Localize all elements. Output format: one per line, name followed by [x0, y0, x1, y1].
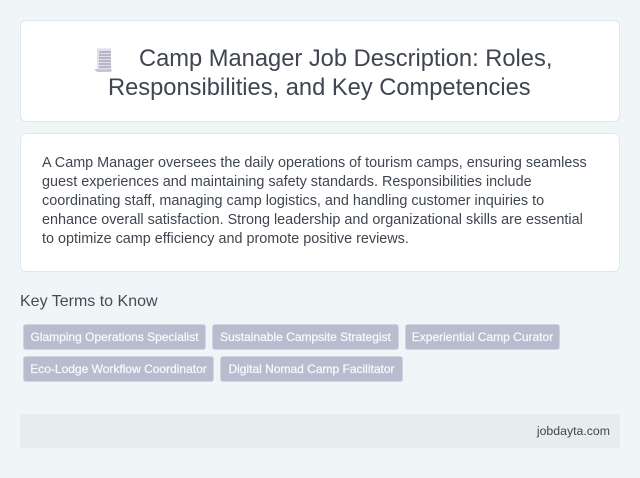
- tag: [405, 324, 560, 350]
- description text: guest experiences and maintaining safety standards. Responsibilities include: [42, 174, 532, 190]
- description text: to optimize camp efficiency and promote positive reviews.: [42, 231, 409, 247]
- footer source: jobdayta.com: [537, 424, 610, 438]
- title: Camp Manager Job Description: Roles,: [139, 46, 552, 72]
- description text: [42, 155, 587, 247]
- description text: A Camp Manager oversees the daily operations of tourism camps, ensuring seamless: [42, 155, 587, 171]
- tag list: [23, 324, 560, 382]
- tag: [23, 356, 214, 382]
- tag: [212, 324, 399, 350]
- tag: Experiential Camp Curator: [412, 330, 553, 344]
- title: Responsibilities, and Key Competencies: [108, 75, 531, 101]
- tag: Digital Nomad Camp Facilitator: [228, 362, 395, 376]
- title: [108, 46, 552, 101]
- description text: coordinating staff, managing camp logistics, and handling customer inquiries to: [42, 193, 544, 209]
- tag: [23, 324, 206, 350]
- tag: [220, 356, 403, 382]
- tag: Sustainable Campsite Strategist: [220, 330, 391, 344]
- icon: document scroll: [94, 48, 112, 72]
- tag: Glamping Operations Specialist: [30, 330, 199, 344]
- footer bar: [20, 414, 620, 448]
- heading: key terms: Key Terms to Know: [20, 293, 158, 310]
- tag: Eco-Lodge Workflow Coordinator: [30, 362, 207, 376]
- panel: description card: [20, 133, 620, 272]
- description text: enhance overall satisfaction. Strong leadership and organizational skills are essential: [42, 212, 583, 228]
- panel: title card: [20, 20, 620, 122]
